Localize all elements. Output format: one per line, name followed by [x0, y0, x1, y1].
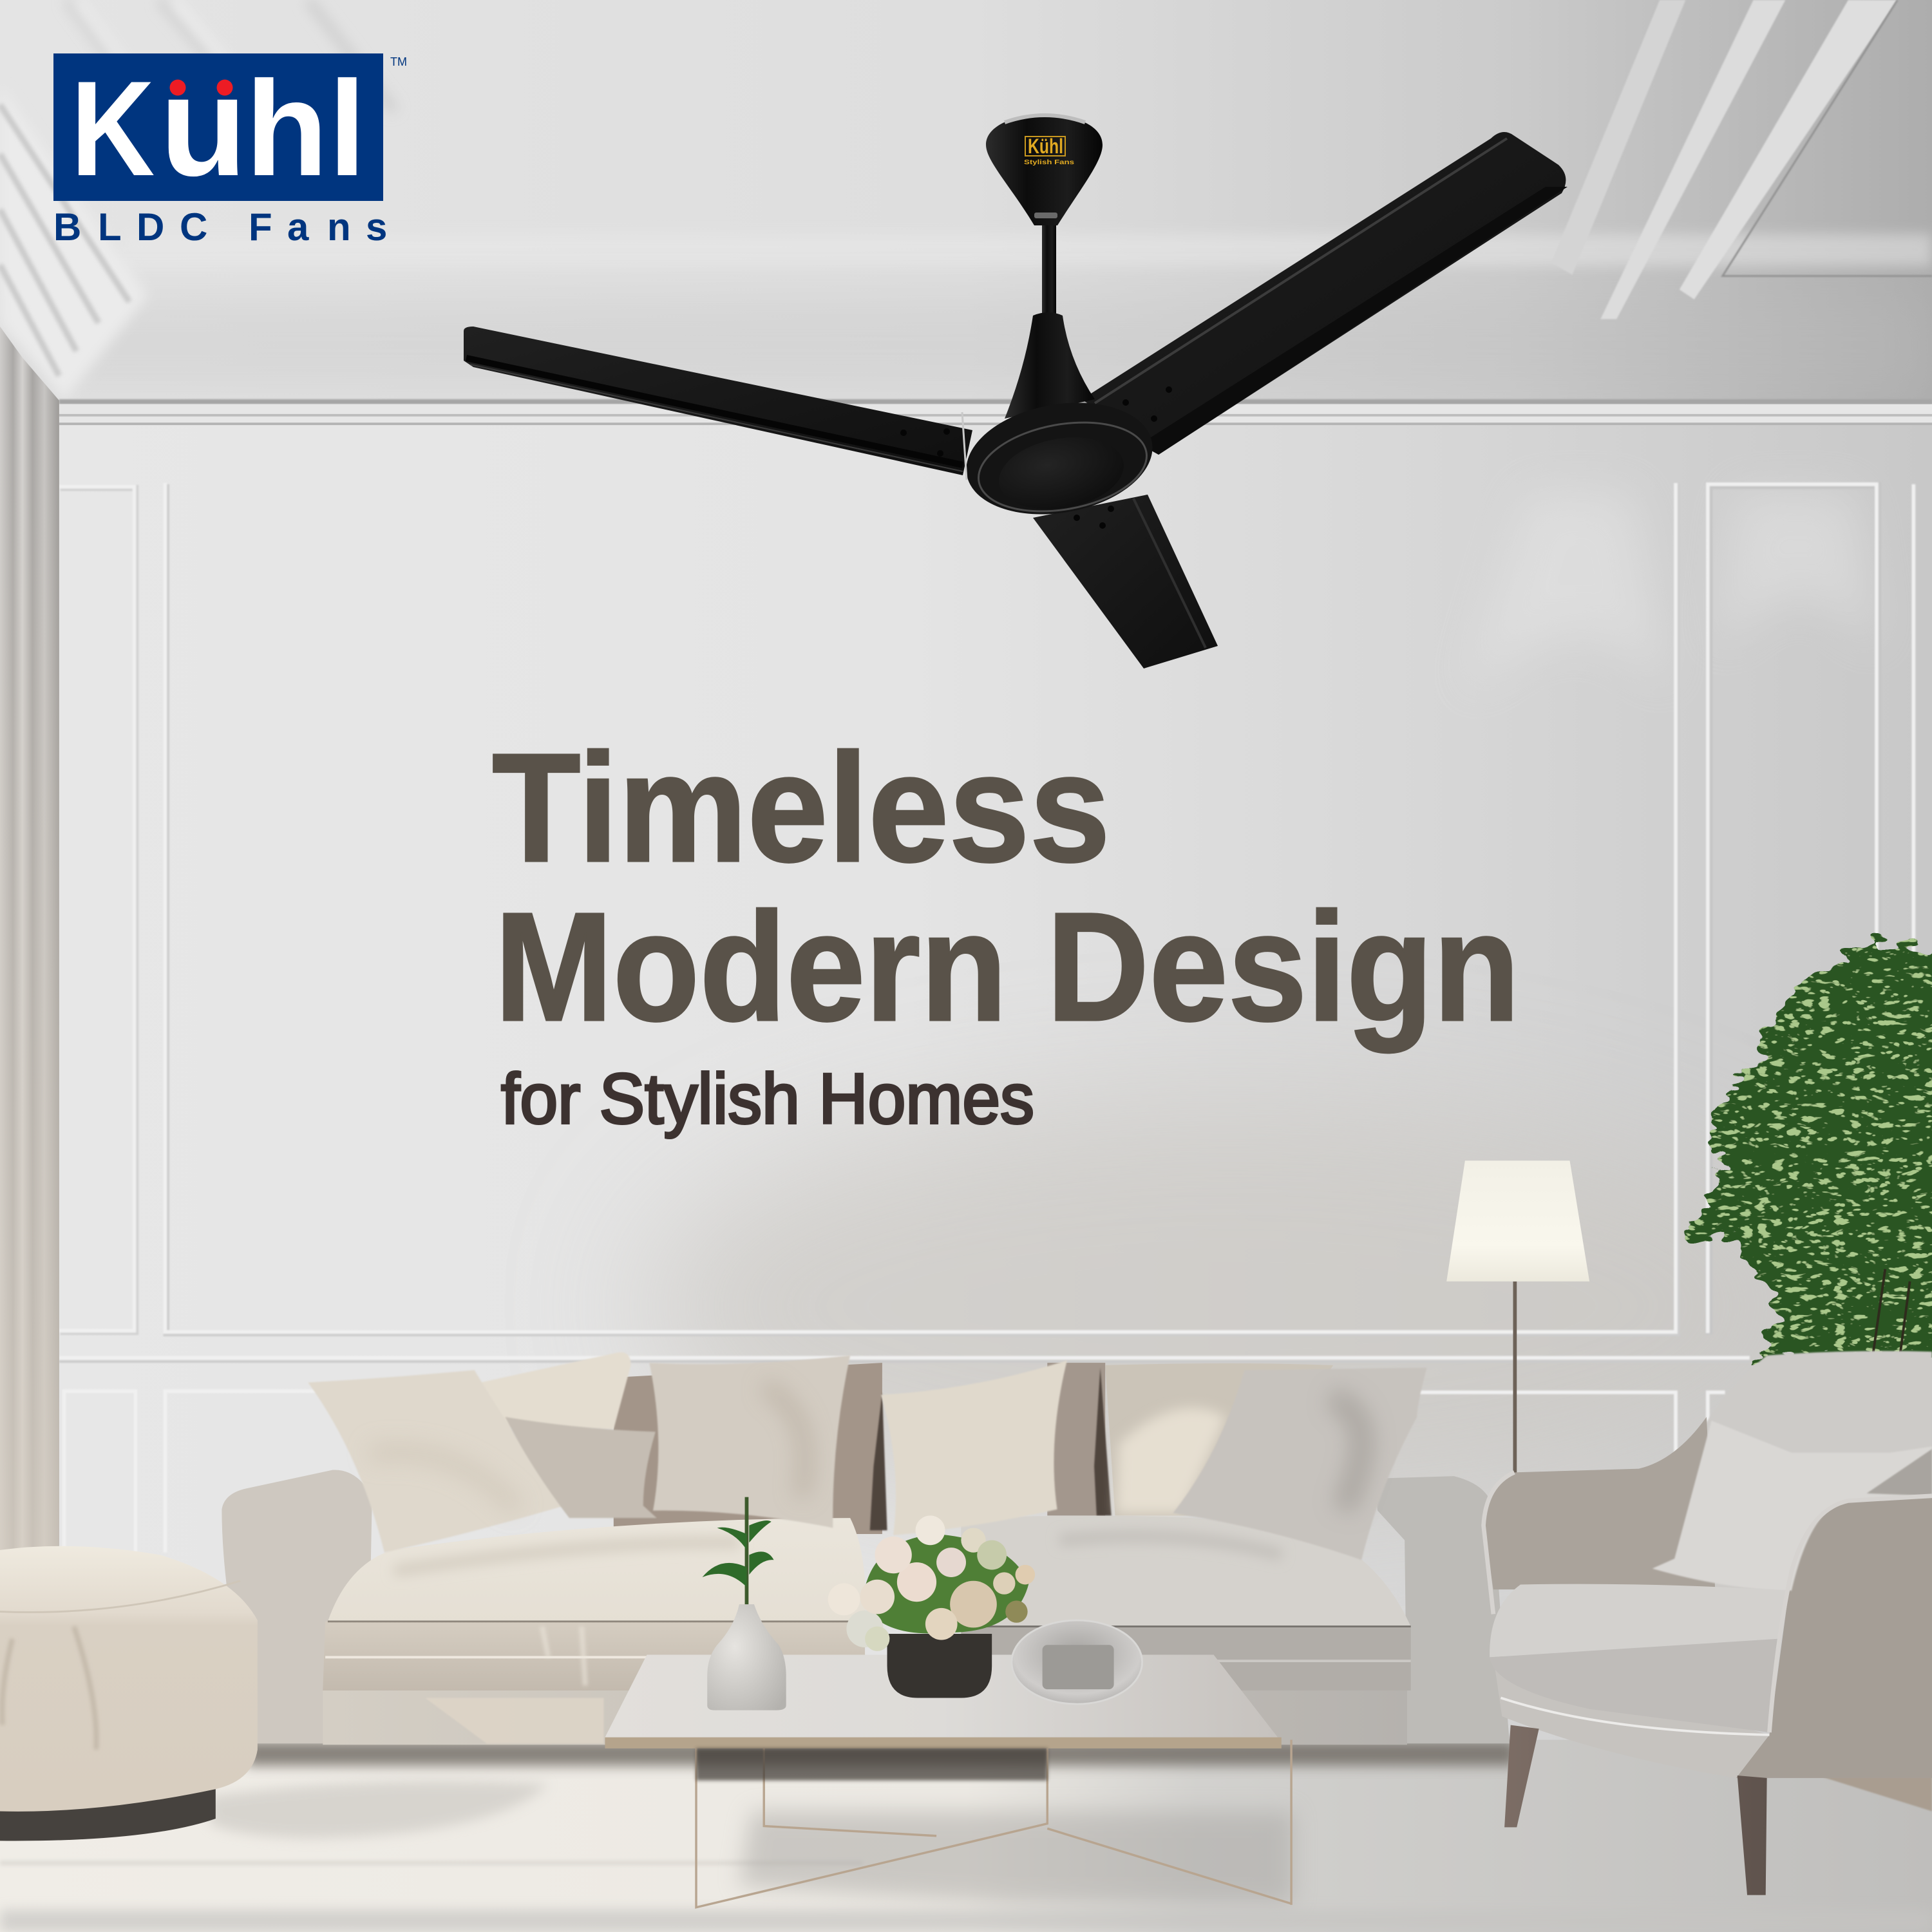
left pillows	[308, 1352, 850, 1553]
armchair	[1484, 1351, 1932, 1895]
chair arm trim	[1484, 1472, 1932, 1732]
logo wordmark: u	[160, 46, 247, 206]
logo red dots	[170, 80, 233, 95]
headline line 1: Timeless	[492, 721, 1110, 894]
glass ornament	[1012, 1620, 1142, 1704]
canopy logo	[1024, 135, 1075, 166]
chair right arm	[1736, 1496, 1932, 1778]
logo wordmark: K	[71, 53, 155, 204]
coffee table	[605, 1655, 1291, 1908]
fan left blade	[464, 327, 972, 475]
fan motor housing cone	[1005, 312, 1095, 419]
canopy logo: Kühl	[1028, 135, 1063, 158]
plant	[1689, 942, 1932, 1361]
logo tagline: D	[137, 205, 164, 249]
canopy logo: Stylish Fans	[1024, 159, 1075, 166]
trademark: TM	[390, 55, 407, 68]
fan motor	[958, 389, 1161, 528]
headline line 2: Modern Design	[495, 880, 1520, 1053]
ottoman	[0, 1546, 258, 1841]
wall	[59, 419, 1932, 1774]
logo tagline: s	[366, 205, 387, 249]
flowers	[828, 1515, 1035, 1651]
logo tagline: L	[98, 205, 122, 249]
chair pillow	[1653, 1421, 1932, 1591]
chair seat cushion	[1490, 1584, 1788, 1657]
logo wordmark: h	[245, 53, 328, 204]
ceiling	[0, 0, 1932, 419]
curtain	[0, 327, 59, 1555]
chair back	[1639, 1351, 1932, 1602]
fan downrod	[1042, 222, 1056, 322]
headline	[492, 721, 1520, 1139]
chair left arm and inner	[1484, 1417, 1715, 1589]
vase with sprig	[703, 1497, 786, 1710]
logo tagline: C	[180, 205, 207, 249]
logo box	[53, 53, 383, 201]
left arm	[222, 1470, 372, 1743]
logo tagline: F	[249, 205, 272, 249]
left seat cushion	[323, 1518, 866, 1690]
logo tagline: B	[53, 205, 81, 249]
sofa base	[323, 1690, 1407, 1745]
flower bowl	[828, 1515, 1035, 1698]
fan canopy	[986, 115, 1103, 225]
wall panel mouldings	[59, 483, 1913, 1553]
lamp	[1446, 1160, 1589, 1476]
logo tagline: a	[287, 205, 309, 249]
sofa back cushions	[614, 1363, 1333, 1534]
ceiling fan	[464, 115, 1567, 668]
subheadline: for Stylish Homes	[501, 1059, 1034, 1139]
chair skirt	[1493, 1657, 1769, 1778]
logo wordmark: l	[328, 53, 366, 204]
logo tagline: n	[327, 205, 351, 249]
chair legs	[1504, 1725, 1767, 1895]
right arm	[1374, 1476, 1510, 1743]
fan lower blade	[1033, 495, 1218, 668]
right pillow	[1173, 1368, 1427, 1560]
sofa	[222, 1352, 1510, 1745]
crown moulding	[59, 399, 1932, 425]
logo	[53, 46, 407, 249]
centre pillow	[881, 1360, 1067, 1535]
fan right blade	[1082, 132, 1567, 455]
logo wordmark	[71, 46, 366, 206]
rug / floor	[0, 1740, 1932, 1932]
right seat cushion	[961, 1516, 1411, 1690]
